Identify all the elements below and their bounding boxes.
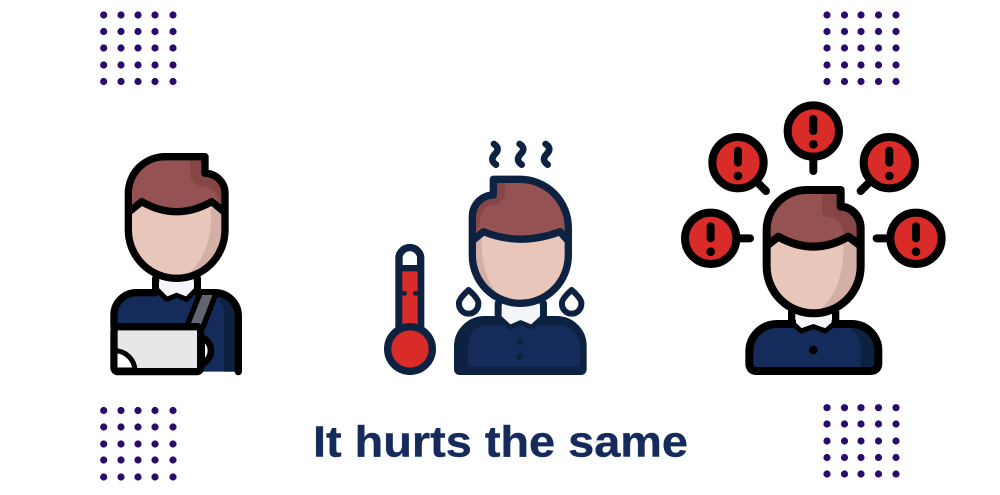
alert bubble: upper left <box>712 137 766 191</box>
thermometer <box>388 248 432 371</box>
dot grid: top left <box>100 11 177 85</box>
title: It hurts the same <box>313 418 688 466</box>
alert bubble: upper right <box>861 137 915 191</box>
icon: man with fever and thermometer <box>388 144 583 372</box>
alert bubble: top <box>788 105 839 171</box>
sweat drops <box>459 290 478 314</box>
icon: man surrounded by alert bubbles <box>685 105 942 371</box>
alert bubble: left <box>685 213 750 264</box>
steam squiggles <box>492 144 549 165</box>
dot grid: bottom right <box>823 404 900 478</box>
alert bubble: right <box>877 213 942 264</box>
person <box>749 190 878 371</box>
dot grid: top right <box>823 11 900 85</box>
dot grid: bottom left <box>100 407 177 481</box>
icon: man with arm in sling <box>114 157 238 372</box>
